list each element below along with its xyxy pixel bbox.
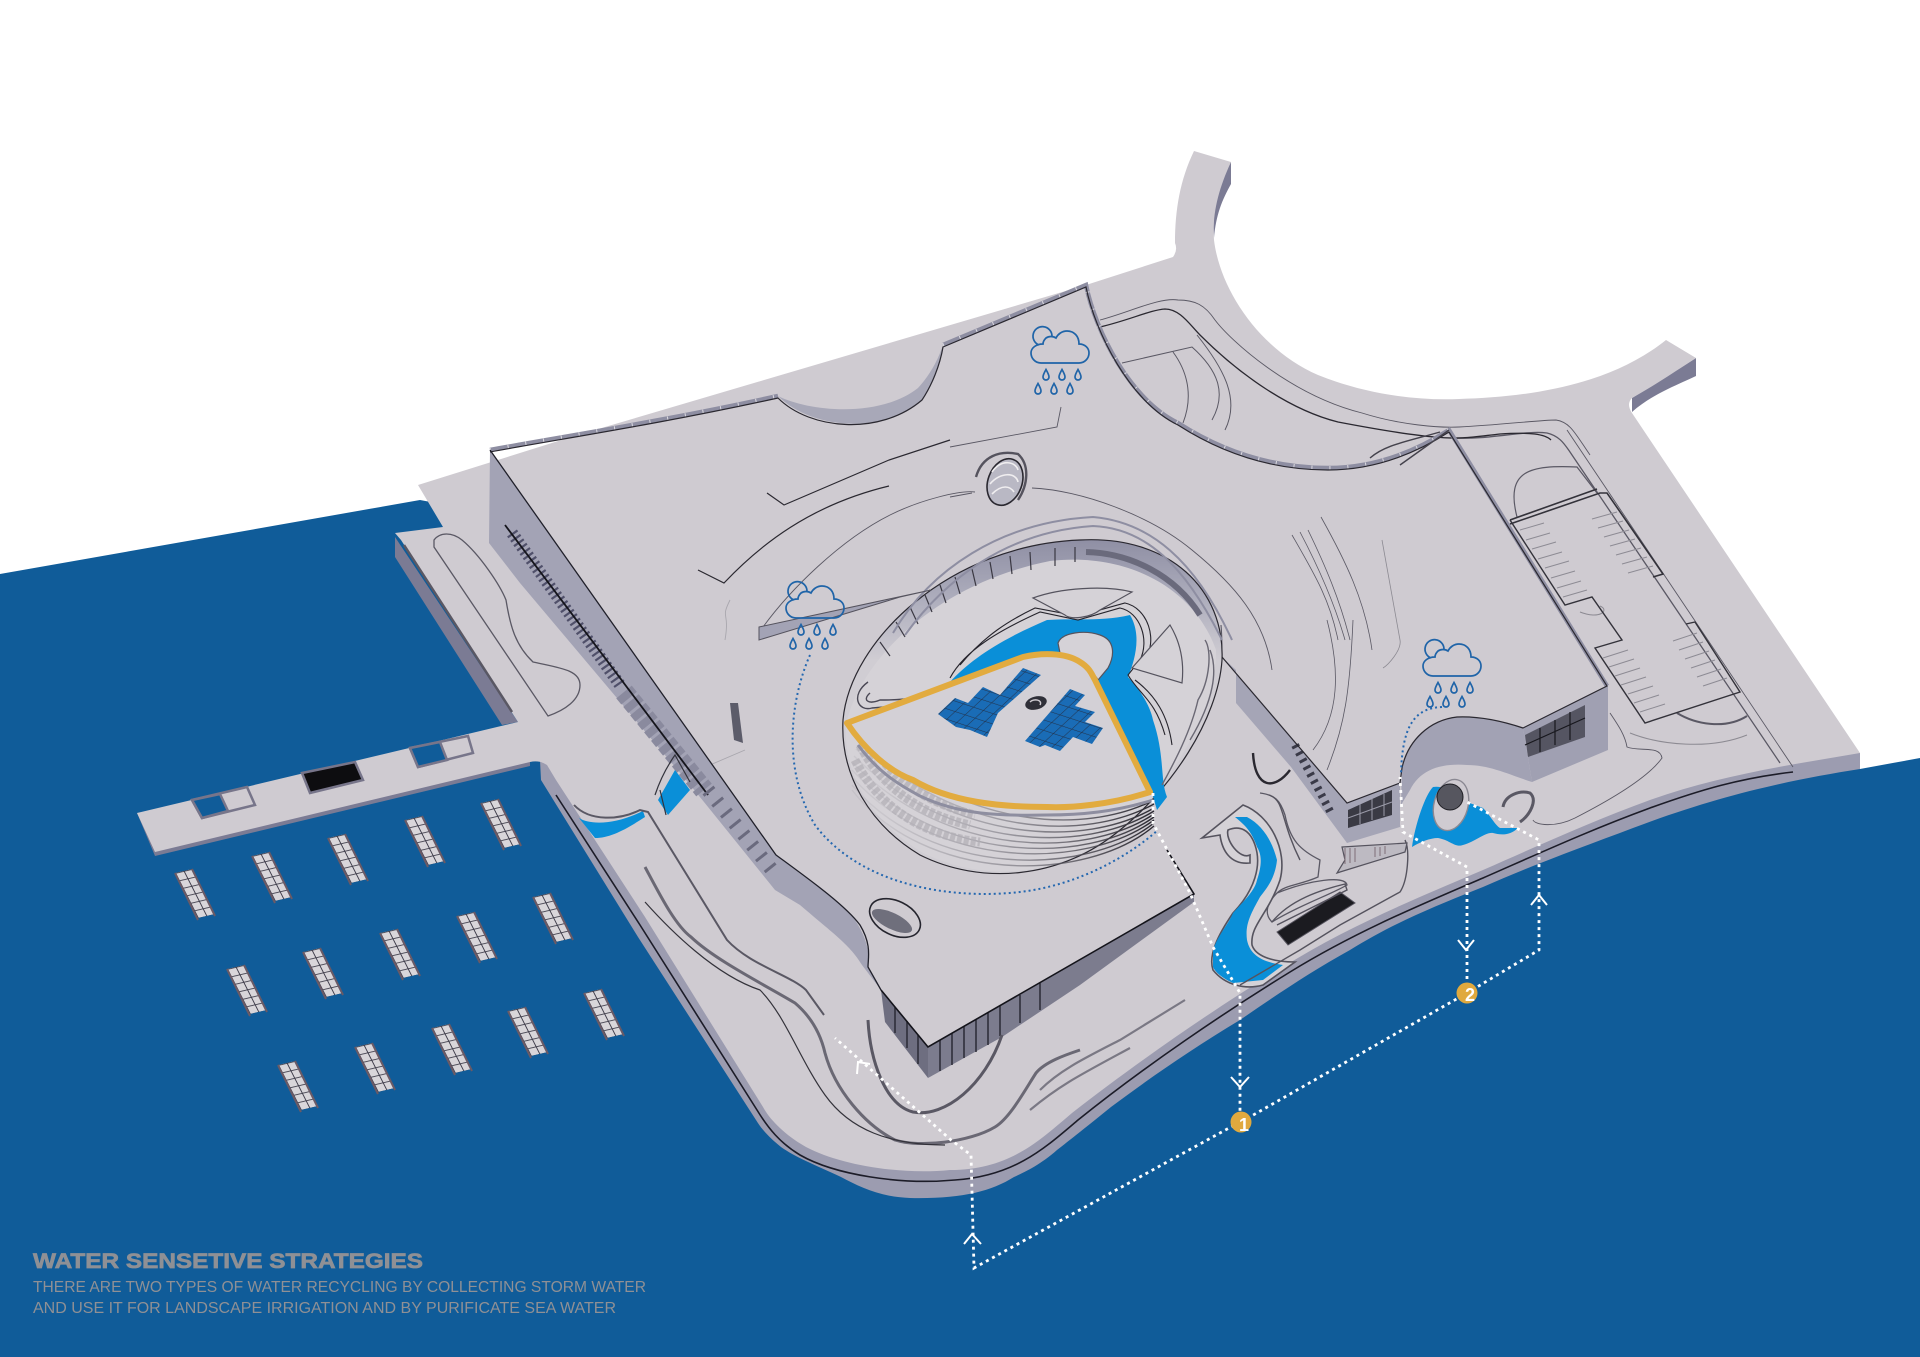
roof outline strokes <box>490 287 1607 803</box>
west courtyard curl <box>858 680 960 709</box>
west roof edge <box>490 450 881 990</box>
roof skylight swirl <box>1024 694 1048 712</box>
solar panels <box>938 668 1103 751</box>
north slab in pool <box>1033 588 1132 618</box>
yellow roof lower shadow <box>858 745 1153 815</box>
curved east wall <box>1401 717 1532 805</box>
road arm end faces and west strip side <box>137 162 1696 856</box>
central oval courtyard <box>759 517 1232 874</box>
roof ellipse opening, south-west courtyard <box>863 891 927 945</box>
south roof edge <box>881 850 1194 1047</box>
marker 2 <box>1456 982 1478 1005</box>
courtyard upper-right dark wall <box>1086 552 1200 615</box>
amphitheatre seat rows <box>852 735 1154 866</box>
site slab side faces <box>540 753 1860 1198</box>
marker 1: 1 <box>1239 1115 1249 1135</box>
south-west facade corner <box>881 990 928 1078</box>
east courtyard strip <box>1162 640 1214 785</box>
cloud icon: east <box>1423 640 1481 707</box>
slab edge shadow line <box>556 772 1793 1181</box>
courtyard wall panel lines <box>880 547 1075 656</box>
flow arrowheads <box>857 895 1547 1244</box>
caption heading: WATER SENSETIVE STRATEGIES <box>33 1250 423 1273</box>
roof edge parapet panels <box>490 285 1607 686</box>
small wall slit on roof <box>730 703 743 743</box>
site ground surface <box>137 151 1860 1171</box>
caption <box>33 1250 646 1317</box>
east long wall <box>1222 657 1347 843</box>
yellow roof outline <box>847 654 1150 807</box>
white dotted recycling loop <box>835 777 1539 1268</box>
parking bays <box>1510 489 1740 723</box>
eye pool <box>1412 775 1533 847</box>
pool <box>950 615 1167 810</box>
west curved wall windows <box>708 790 776 875</box>
amphitheatre left seating texture <box>855 740 980 842</box>
rooftop shard wall <box>759 590 931 640</box>
cloud icon: west <box>786 582 844 649</box>
west wall fins <box>512 533 620 685</box>
pool island <box>1058 632 1113 680</box>
rooftop skylight <box>976 453 1029 510</box>
caption body line 2: AND USE IT FOR LANDSCAPE IRRIGATION AND BY PURIFICATE SEA WATER <box>33 1300 616 1317</box>
water channel, south-west <box>574 805 1185 1145</box>
marker 2: 2 <box>1465 985 1475 1005</box>
swan side terrain <box>1240 795 1408 985</box>
terrace stairs <box>1337 843 1407 873</box>
black service pit <box>1277 892 1355 945</box>
east fan slab <box>1132 625 1183 683</box>
small roof stair wedges <box>1370 430 1449 465</box>
sea <box>0 500 1920 1357</box>
courtyard floor <box>846 560 1216 872</box>
east wall fins <box>1295 745 1332 815</box>
landscape terrain lines <box>404 300 1793 922</box>
south-east glazed wing <box>1347 783 1400 843</box>
outer ring band <box>893 517 1232 640</box>
west wall base line <box>505 525 708 795</box>
floating solar platforms <box>175 799 624 1112</box>
marker 1 <box>1230 1112 1252 1135</box>
caption body line 1: THERE ARE TWO TYPES OF WATER RECYCLING BY COLLECTING STORM WATER <box>33 1279 646 1296</box>
swan pool <box>1202 805 1295 987</box>
north roof notch wall <box>778 345 943 424</box>
west wall windows <box>624 692 704 790</box>
swan pool water <box>1213 817 1283 983</box>
eye pool curl <box>1503 792 1533 822</box>
pier water openings and plant room <box>192 736 473 818</box>
west pocket with blue wedge <box>655 755 690 815</box>
eye pool sphere <box>1437 784 1463 810</box>
south building facade <box>928 894 1194 1078</box>
south facade mullions <box>895 983 1040 1071</box>
east glazed corner <box>1523 686 1608 782</box>
eye pool island <box>1428 775 1474 835</box>
pool terraces <box>950 603 1172 745</box>
long west wall <box>489 450 881 990</box>
blue dotted stormwater paths <box>793 655 1442 894</box>
cloud icon: north <box>1031 327 1089 394</box>
